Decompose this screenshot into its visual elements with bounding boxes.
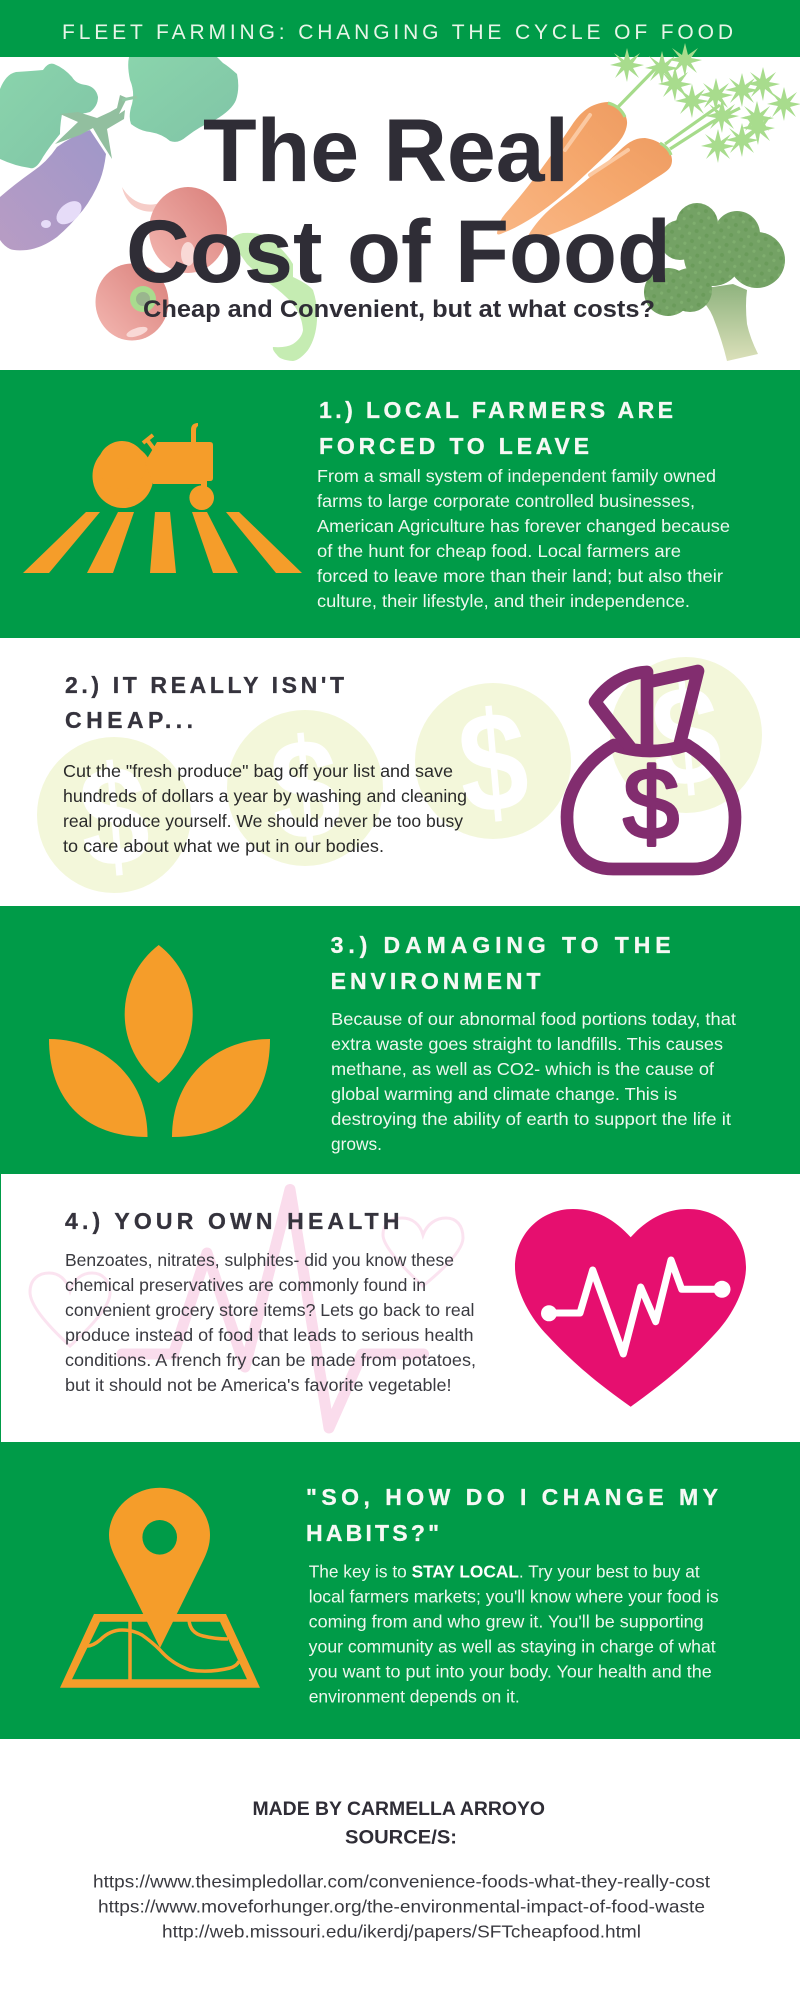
heading (306, 1484, 718, 1546)
body text: Cut the "fresh produce" bag off your list and save (63, 761, 453, 781)
main title: The Real (203, 100, 569, 200)
body text: American Agriculture has forever changed because (317, 516, 730, 536)
body text: destroying the ability of earth to support the life it (331, 1109, 731, 1129)
body text: extra waste goes straight to landfills. This causes (331, 1034, 723, 1054)
body text: Because of our abnormal food portions today, that (331, 1009, 736, 1029)
background coins (37, 655, 762, 899)
body text: coming from and who grew it. You'll be supporting (309, 1612, 704, 1632)
heading (319, 397, 673, 459)
illustration: carrots (497, 43, 800, 242)
icon: map pin on map (60, 1488, 260, 1688)
source links: https://www.moveforhunger.org/the-environmental-impact-of-food-waste (98, 1896, 705, 1916)
panel: it really isn't cheap (0, 638, 800, 906)
icon: tractor on field (23, 423, 302, 573)
panel: local farmers (0, 370, 800, 638)
body text: farms to large corporate controlled businesses, (317, 491, 695, 511)
body text: chemical preservatives are commonly found in (65, 1275, 426, 1295)
heading: 4.) YOUR OWN HEALTH (65, 1208, 400, 1234)
hero panel with vegetables and title (0, 43, 800, 361)
body text: of the hunt for cheap food. Local farmers are (317, 541, 681, 561)
body text: convenient grocery store items? Lets go back to real (65, 1300, 474, 1320)
heading: CHEAP... (65, 707, 193, 733)
body text: local farmers markets; you'll know where your food is (309, 1586, 719, 1606)
source links (93, 1872, 710, 1942)
author and source heading: SOURCE/S: (345, 1828, 457, 1848)
main title (126, 100, 671, 301)
icon: money bag: $ (623, 748, 679, 860)
body text: real produce yourself. We should never be too busy (63, 811, 463, 831)
body text: conditions. A french fry can be made from potatoes, (65, 1350, 476, 1370)
panel: your own health (0, 1174, 800, 1442)
illustration: broccoli (644, 203, 785, 361)
body text: but it should not be America's favorite vegetable! (65, 1375, 452, 1395)
body text: to care about what we put in our bodies. (63, 836, 384, 856)
body text: you want to put into your body. Your health and the (309, 1662, 712, 1682)
subtitle: Cheap and Convenient, but at what costs? (143, 296, 655, 323)
heading: "SO, HOW DO I CHANGE MY (306, 1484, 718, 1510)
panel: damaging to the environment (0, 906, 800, 1174)
body text (309, 1562, 719, 1706)
body text (65, 1250, 476, 1395)
heading (331, 932, 671, 994)
body text: methane, as well as CO2- which is the cause of (331, 1059, 714, 1079)
heading (65, 672, 344, 733)
heading: 1.) LOCAL FARMERS ARE (319, 397, 673, 423)
background coins: $ (264, 708, 346, 872)
heading: FORCED TO LEAVE (319, 433, 589, 459)
body text (317, 466, 730, 611)
heading: ENVIRONMENT (331, 968, 541, 994)
icon: money bag (567, 671, 735, 869)
illustration: eggplant with leaves (0, 57, 238, 250)
heading: 2.) IT REALLY ISN'T (65, 672, 344, 698)
author and source heading: MADE BY CARMELLA ARROYO (252, 1799, 545, 1820)
background coins: $ (73, 735, 155, 899)
background coins: $ (645, 655, 727, 819)
author and source heading (252, 1799, 545, 1848)
heading: 3.) DAMAGING TO THE (331, 932, 671, 958)
body text: hundreds of dollars a year by washing and cleaning (63, 786, 467, 806)
heading: HABITS?" (306, 1520, 439, 1546)
icon: three leaves (49, 945, 270, 1137)
body text: global warming and climate change. This is (331, 1084, 677, 1104)
source links: https://www.thesimpledollar.com/convenience-foods-what-they-really-cost (93, 1872, 710, 1892)
body text: grows. (331, 1134, 382, 1154)
body text: produce instead of food that leads to serious health (65, 1325, 474, 1345)
footer credits (93, 1799, 710, 1942)
source links: http://web.missouri.edu/ikerdj/papers/SFTcheapfood.html (162, 1922, 641, 1942)
panel: how do I change my habits (0, 1442, 800, 1739)
body text: The key is to STAY LOCAL. Try your best to buy at (309, 1562, 700, 1582)
illustration: radishes (96, 187, 317, 361)
background pulse line and hearts (30, 1190, 463, 1428)
body text: From a small system of independent family owned (317, 466, 716, 486)
top banner: FLEET FARMING: CHANGING THE CYCLE OF FOOD (62, 21, 733, 44)
main title: Cost of Food (126, 201, 671, 301)
icon: heart with pulse (515, 1209, 746, 1407)
body text: environment depends on it. (309, 1686, 520, 1706)
body text: culture, their lifestyle, and their independence. (317, 591, 690, 611)
background coins: $ (452, 681, 534, 845)
top banner (0, 0, 800, 57)
body text (331, 1009, 736, 1154)
body text: Benzoates, nitrates, sulphites- did you know these (65, 1250, 454, 1270)
body text (63, 761, 467, 856)
body text: forced to leave more than their land; but also their (317, 566, 723, 586)
body text: your community as well as staying in charge of what (309, 1636, 716, 1656)
